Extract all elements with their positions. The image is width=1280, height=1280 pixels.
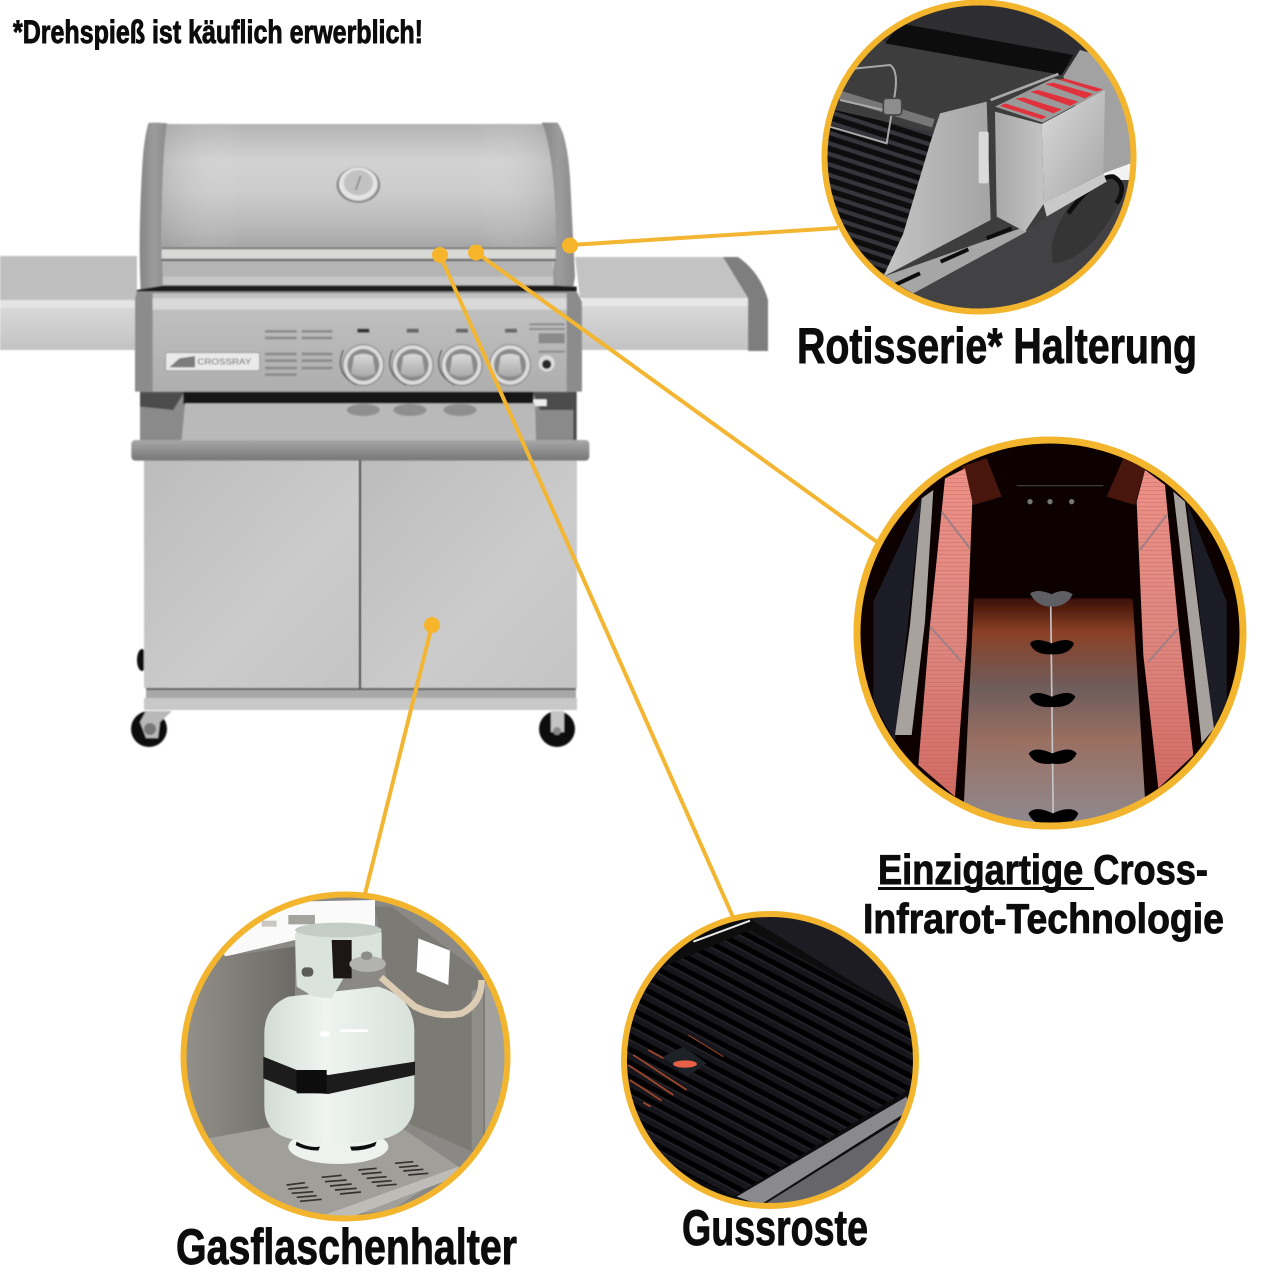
connector: cast grates (432, 247, 733, 917)
cabinet doors (144, 458, 577, 688)
caption: unique cross infrared technology (863, 846, 1224, 942)
tray shadows (347, 404, 477, 416)
caption line 2: Infrarot-Technologie (863, 895, 1224, 942)
bottom shelf (144, 688, 577, 710)
knob 1 (340, 329, 384, 385)
grill illustration (0, 123, 768, 747)
note: rotisserie sold separately: *Drehspieß ist käuflich erwerblich! (13, 14, 423, 50)
drip tray (182, 403, 536, 440)
control panel (135, 292, 582, 392)
left side shelf (0, 256, 137, 350)
connector: cross infrared (468, 244, 877, 542)
brand plate (166, 353, 260, 371)
caption underline (878, 887, 1094, 890)
caption line 1: Einzigartige Cross- (878, 846, 1208, 893)
knob 3 (439, 329, 482, 385)
upper grill body (131, 123, 589, 461)
lid shell (162, 124, 556, 247)
right castor wheel (539, 711, 575, 747)
caption: cast grates: Gussroste (682, 1200, 868, 1256)
lid handle (162, 247, 556, 287)
knob 4 (490, 329, 530, 385)
connector: rotisserie (562, 228, 838, 254)
instruction labels (265, 323, 565, 376)
ignition button (539, 355, 555, 371)
lid side band right (542, 123, 575, 288)
detail circle: cross infrared burners (850, 435, 1250, 835)
connector: gas bottle holder (365, 617, 440, 894)
detail circle: cast iron grates (620, 910, 920, 1210)
right side shelf (575, 257, 768, 351)
brand plate: CROSSRAY (197, 356, 252, 366)
lid side band left (140, 123, 167, 290)
left castor wheel (131, 711, 172, 747)
knob 2 (390, 329, 433, 385)
detail circle: gas bottle holder (175, 890, 515, 1230)
thermometer (336, 167, 380, 203)
lid seam (137, 285, 577, 292)
gap and brackets below control panel (140, 392, 577, 442)
tray front bar (131, 440, 589, 461)
caption: gas bottle holder: Gasflaschenhalter (176, 1219, 517, 1275)
rear wheel stub (137, 649, 147, 671)
detail circle: rotisserie bracket (813, 0, 1147, 327)
